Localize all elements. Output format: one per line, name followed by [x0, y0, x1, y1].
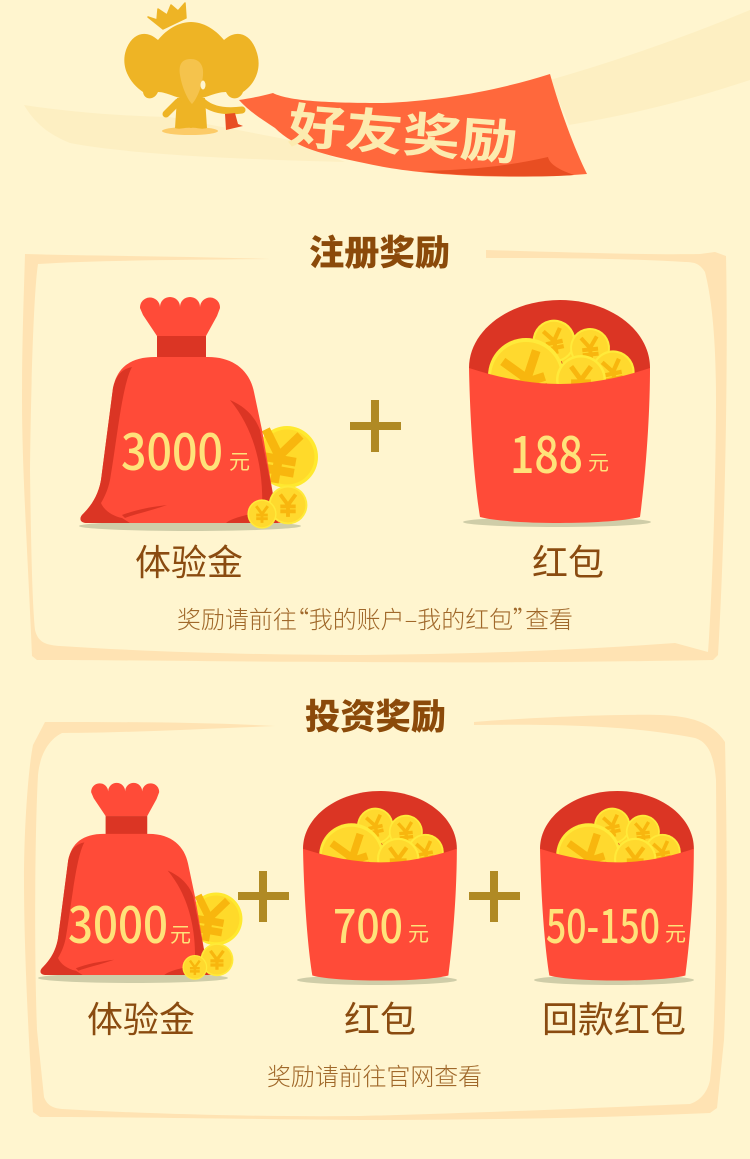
- envelope amount: 188: [510, 416, 583, 488]
- background swoosh: upper right: [550, 10, 750, 125]
- label: red envelope, second row: 红包: [344, 991, 416, 1043]
- panel frame: investment reward: [24, 715, 727, 1120]
- red envelope: 188: [463, 300, 651, 527]
- elephant shadow: [162, 127, 218, 135]
- elephant trunk: [180, 59, 203, 104]
- banner title text: 好友奖励: [286, 86, 521, 174]
- envelope unit: 元: [588, 447, 609, 477]
- red envelope: 50-150: [534, 791, 694, 985]
- crown: [148, 3, 186, 29]
- envelope amount: 50-150: [546, 891, 660, 957]
- envelope shadow: [297, 975, 457, 985]
- plus icon: [350, 400, 401, 452]
- bag unit: 元: [170, 919, 191, 949]
- elephant tusk: [200, 80, 206, 90]
- envelope shadow: [463, 517, 651, 527]
- ribbon tail: [225, 113, 243, 130]
- elephant arms: [166, 102, 242, 114]
- label: trial fund, second row: 体验金: [87, 991, 195, 1043]
- note: where to view registration reward: 奖励请前往“我的账户–我的红包”查看: [177, 600, 573, 635]
- label: red envelope: 红包: [532, 534, 604, 586]
- bag amount: 3000: [68, 886, 168, 958]
- label: trial fund: 体验金: [135, 534, 243, 586]
- plus icon: [238, 871, 289, 922]
- background swoosh: left: [24, 105, 345, 162]
- note: where to view investment reward: 奖励请前往官网查看: [267, 1057, 482, 1092]
- label: repayment red envelope: 回款红包: [542, 991, 686, 1043]
- bag amount: 3000: [121, 413, 223, 485]
- envelope unit: 元: [665, 918, 686, 948]
- bag shadow: [38, 973, 228, 983]
- elephant body: [175, 98, 207, 129]
- red bag: trial fund 3000: [79, 297, 318, 531]
- plus icon: [469, 871, 520, 922]
- red envelope: 700: [297, 791, 457, 985]
- banner fold: [421, 157, 574, 176]
- heading: registration reward: 注册奖励: [309, 225, 450, 276]
- panel frame: registration reward: [22, 250, 727, 662]
- elephant mascot: [124, 3, 259, 135]
- red bag: trial fund 3000, second row: [38, 783, 242, 983]
- heading: investment reward: 投资奖励: [305, 689, 446, 740]
- envelope shadow: [534, 975, 694, 985]
- envelope amount: 700: [333, 891, 403, 957]
- title banner: [239, 74, 587, 177]
- elephant head and ears: [124, 22, 259, 100]
- bag shadow: [79, 521, 301, 531]
- envelope unit: 元: [408, 918, 429, 948]
- bag unit: 元: [229, 446, 250, 476]
